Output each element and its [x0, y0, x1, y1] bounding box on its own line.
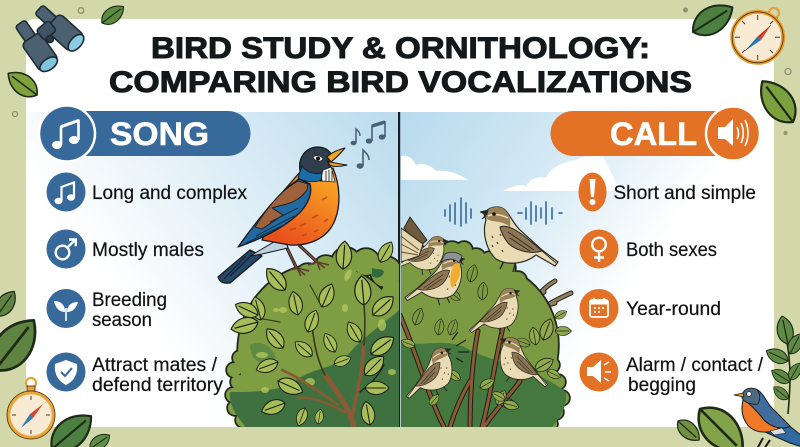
song item: mostly males: Mostly males [92, 240, 204, 261]
sound wave left [445, 198, 471, 226]
song icon badge [39, 106, 95, 162]
speaker icon [718, 119, 748, 146]
call item: year-round [580, 289, 721, 328]
head [300, 147, 333, 181]
hinge [36, 20, 57, 41]
icon: compass top right [732, 8, 783, 63]
call item: alarm contact begging: begging [628, 375, 696, 396]
female symbol [592, 238, 606, 262]
bush: call side [399, 242, 572, 431]
foliage patches [256, 268, 396, 393]
leaves [229, 239, 398, 428]
title: BIRD STUDY & ORNITHOLOGY: [151, 32, 650, 65]
song label: SONG [110, 116, 209, 152]
call item: short and simple: Short and simple [614, 183, 756, 204]
flapping bird [401, 216, 448, 275]
icon: compass bottom left [7, 378, 55, 439]
sound wave right [518, 202, 562, 224]
legs [286, 245, 317, 269]
eye [313, 156, 323, 161]
alarm speaker icon [587, 360, 601, 383]
song item: attract mates [46, 352, 224, 396]
calendar icon [590, 298, 608, 317]
sky panel: call side [400, 112, 774, 427]
white throat [322, 167, 335, 182]
icon: binoculars [11, 1, 87, 75]
side sprig [763, 314, 800, 414]
filled leaves [399, 308, 572, 412]
song item: long and complex [46, 172, 247, 212]
song header pill [39, 106, 250, 162]
beak [327, 148, 345, 162]
lower-right bird [492, 335, 555, 391]
lower-left bird [406, 348, 452, 399]
wing feathers [401, 228, 423, 262]
call item: alarm contact begging [580, 352, 764, 396]
dark foliage patch [401, 340, 566, 427]
branches [312, 306, 384, 393]
branches [400, 315, 520, 427]
middle bird [466, 288, 524, 337]
grey cap and orange breast [441, 252, 462, 263]
call item: short and simple [578, 172, 756, 212]
alarm lines [452, 332, 469, 362]
dark lower foliage [230, 310, 399, 427]
song note icon [52, 120, 79, 149]
small circles [12, 8, 791, 135]
song item: mostly males [46, 230, 204, 268]
sky panel: song side [26, 112, 399, 427]
divider [398, 112, 400, 427]
title: COMPARING BIRD VOCALIZATIONS [109, 66, 692, 99]
exclamation icon [590, 179, 596, 197]
song item: long and complex: Long and complex [92, 183, 247, 204]
outline leaves [410, 263, 531, 410]
twigs [540, 278, 574, 307]
call item: both sexes: Both sexes [626, 240, 717, 261]
robin singing [218, 147, 347, 283]
bush: song side [224, 240, 399, 427]
undertail [250, 236, 288, 256]
call icon badge [706, 106, 760, 160]
male symbol [56, 240, 76, 259]
song item: breeding season: Breeding [92, 290, 167, 311]
small bluebird bottom right [734, 388, 800, 447]
song item: breeding season [46, 289, 167, 331]
barrel left [11, 17, 61, 75]
raised wing [404, 217, 427, 248]
wing [238, 179, 311, 247]
call label: CALL [610, 116, 697, 152]
blue nape [298, 166, 322, 182]
orange-breasted bird [405, 252, 465, 305]
shield icon [55, 360, 77, 385]
sprout icon [54, 301, 78, 321]
tail [218, 250, 262, 283]
song item: attract mates: Attract mates / [92, 355, 218, 376]
breast marks [290, 197, 328, 236]
body [262, 168, 339, 245]
call item: year-round: Year-round [626, 299, 721, 320]
call header pill [550, 106, 760, 160]
top calling bird [480, 207, 558, 272]
clouds [401, 150, 620, 191]
song item: breeding season: season [92, 310, 152, 331]
song item: attract mates: defend territory [92, 375, 224, 396]
call item: both sexes [580, 230, 717, 268]
note icon [54, 182, 75, 204]
title [109, 32, 692, 99]
music notes [350, 122, 385, 169]
call item: alarm contact begging: Alarm / contact / [626, 355, 764, 376]
barrel right [31, 1, 87, 55]
